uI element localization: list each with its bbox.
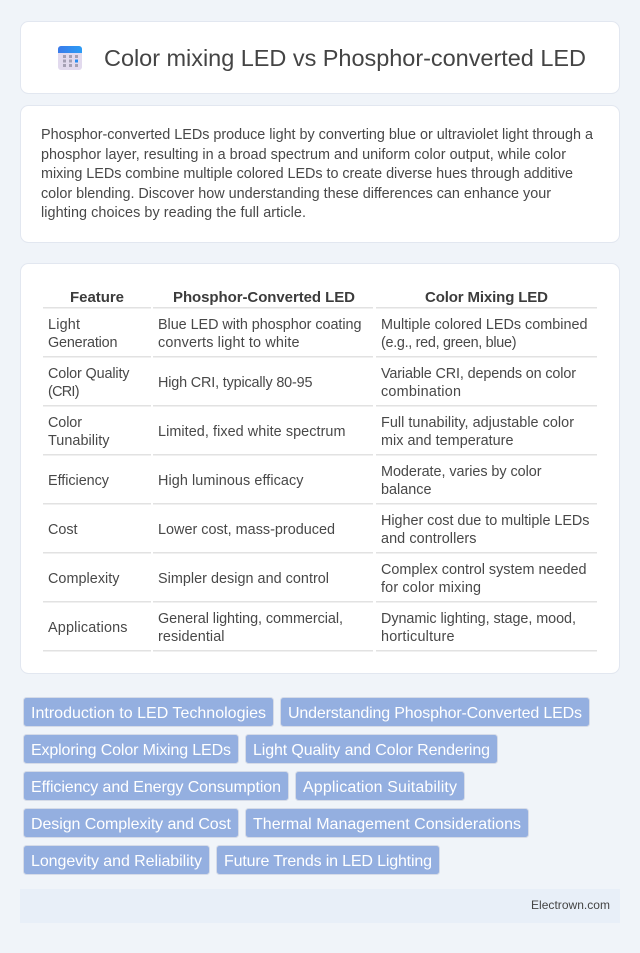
topic tags: Future Trends in LED Lighting — [224, 853, 432, 870]
table row: efficiency: Moderate, varies by color — [381, 464, 542, 480]
topic tags: Thermal Management Considerations — [253, 816, 521, 833]
table row: color tunability: Limited, fixed white spectrum — [158, 424, 346, 440]
panel: title header — [20, 22, 620, 94]
table row: applications: horticulture — [381, 629, 454, 645]
table row: color quality: Variable CRI, depends on color — [381, 366, 576, 382]
panel: intro — [20, 106, 620, 242]
table header: Feature — [70, 289, 124, 306]
table row: complexity — [43, 562, 597, 602]
table row: color tunability: mix and temperature — [381, 433, 514, 449]
panel: comparison table — [20, 264, 620, 674]
table row: color tunability: Full tunability, adjustable color — [381, 415, 574, 431]
table row: light generation: Multiple colored LEDs combined — [381, 317, 588, 333]
topic tags: Application Suitability — [303, 779, 457, 796]
table header: Color Mixing LED — [425, 289, 548, 306]
table row: applications: residential — [158, 629, 224, 645]
title: Color mixing LED vs Phosphor-converted LED — [104, 45, 586, 71]
intro text block: color blending. Discover how understanding these differences can enhance your — [41, 186, 551, 202]
table row: complexity: Complex control system needed — [381, 562, 586, 578]
intro text block: mixing LEDs combine multiple colored LEDs to create diverse hues through additive — [41, 166, 573, 182]
footer credit: Electrown.com — [531, 898, 610, 912]
table row: efficiency — [43, 464, 597, 504]
table row: light generation: Light — [48, 317, 80, 333]
table row: efficiency: balance — [381, 482, 432, 498]
table row: applications: Dynamic lighting, stage, mood, — [381, 611, 576, 627]
table row: light generation: Generation — [48, 335, 118, 351]
table row: color tunability — [43, 415, 597, 456]
table row: color tunability: Tunability — [48, 433, 110, 449]
table row: color tunability: Color — [48, 415, 82, 431]
table row: complexity: for color mixing — [381, 580, 481, 596]
table row: applications: Applications — [48, 620, 128, 636]
topic tags — [24, 698, 590, 874]
table row: light generation: converts light to white — [158, 335, 300, 351]
table row: light generation: (e.g., red, green, blue) — [381, 335, 516, 351]
table row: color quality — [43, 366, 597, 406]
table row: complexity: Simpler design and control — [158, 571, 329, 587]
table row: color quality: High CRI, typically 80-95 — [158, 375, 312, 391]
table row: complexity: Complexity — [48, 571, 120, 587]
footer bar — [20, 889, 620, 923]
topic tags: Exploring Color Mixing LEDs — [31, 742, 231, 759]
intro text block: Phosphor-converted LEDs produce light by converting blue or ultraviolet light through a — [41, 127, 593, 143]
table row: cost: Cost — [48, 522, 78, 538]
intro text block: lighting choices by reading the full article. — [41, 205, 306, 221]
icon: calendar grid — [58, 46, 82, 70]
table header: Phosphor-Converted LED — [173, 289, 355, 306]
topic tags: Understanding Phosphor-Converted LEDs — [288, 705, 582, 722]
topic tags: Design Complexity and Cost — [31, 816, 232, 833]
table row: color quality: Color Quality — [48, 366, 130, 382]
intro text block — [41, 127, 593, 221]
table row: light generation: Blue LED with phosphor coating — [158, 317, 362, 333]
table header — [43, 289, 597, 308]
intro text block: phosphor layer, resulting in a broad spectrum and uniform color output, while color — [41, 147, 566, 163]
table row: light generation — [43, 317, 597, 358]
table row: cost — [43, 513, 597, 554]
table row: cost: and controllers — [381, 531, 476, 547]
topic tags: Longevity and Reliability — [31, 853, 202, 870]
table row: color quality: combination — [381, 384, 461, 400]
table row: color quality: (CRI) — [48, 384, 80, 400]
table row: cost: Lower cost, mass-produced — [158, 522, 335, 538]
topic tags: Introduction to LED Technologies — [31, 705, 266, 722]
topic tags: Light Quality and Color Rendering — [253, 742, 490, 759]
table row: efficiency: High luminous efficacy — [158, 473, 304, 489]
topic tags: Efficiency and Energy Consumption — [31, 779, 281, 796]
table row: applications: General lighting, commercial, — [158, 611, 343, 627]
table row: applications — [43, 611, 597, 652]
table row: cost: Higher cost due to multiple LEDs — [381, 513, 590, 529]
table row: efficiency: Efficiency — [48, 473, 110, 489]
